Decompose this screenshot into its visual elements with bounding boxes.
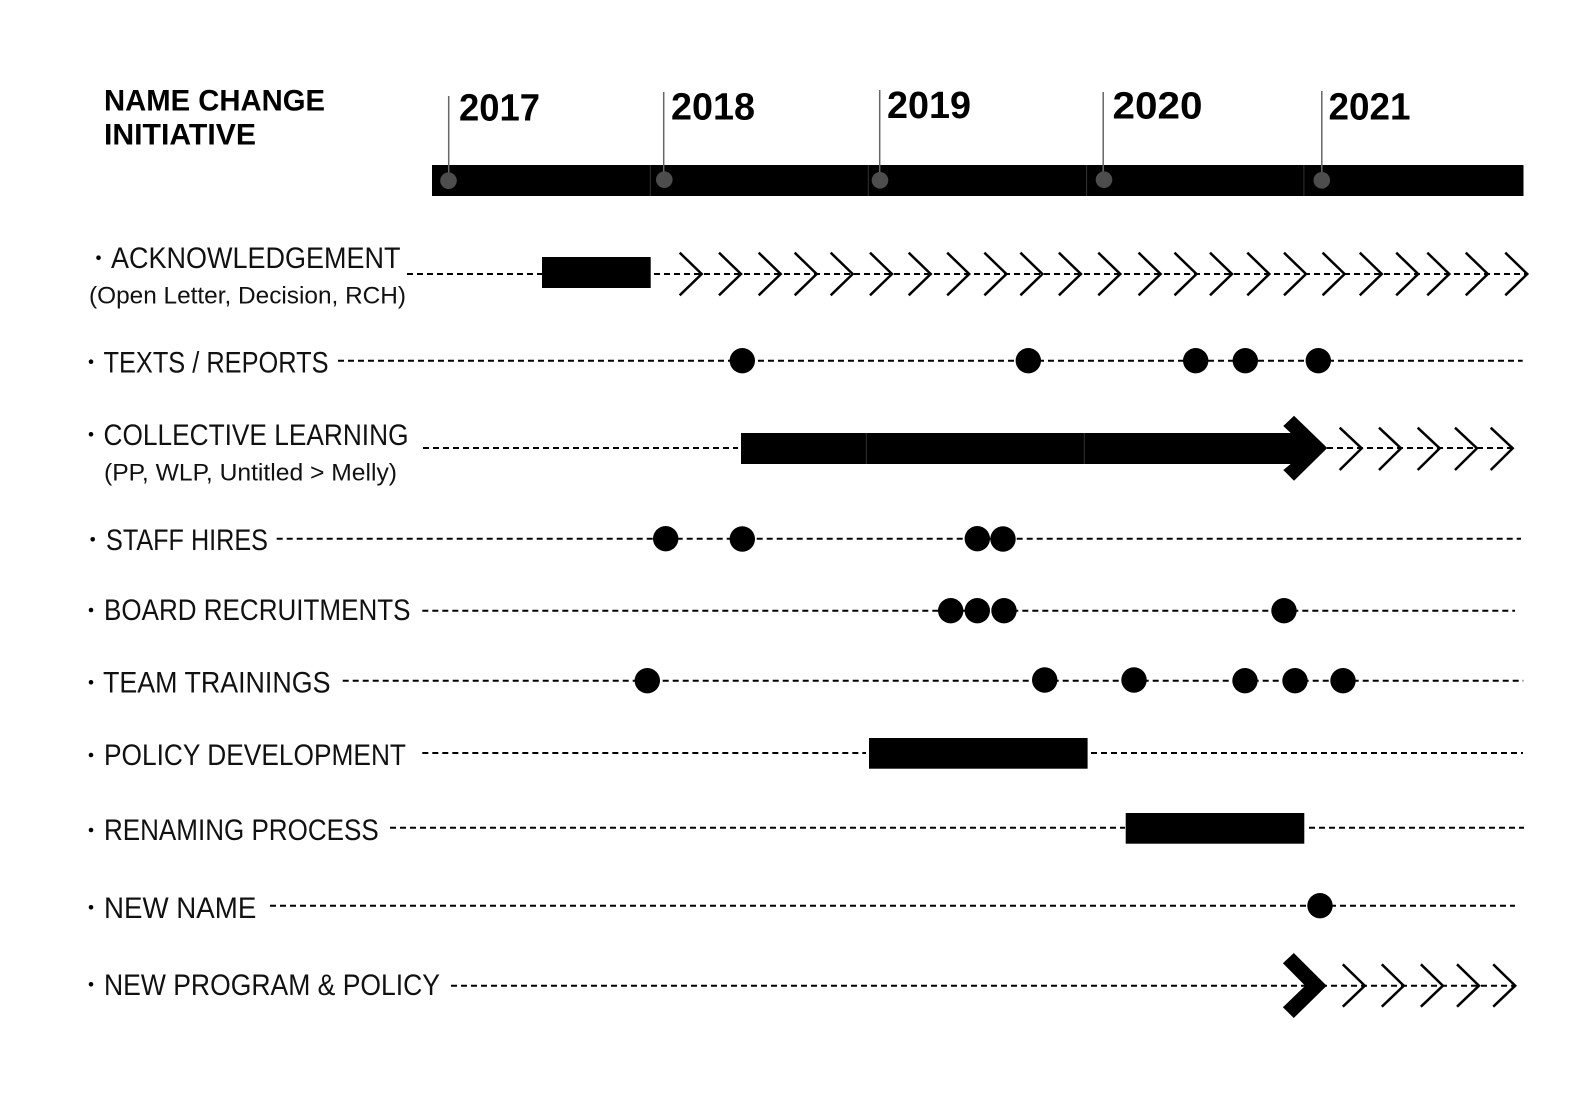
label: new name: NEW NAME bbox=[104, 892, 256, 925]
row: renaming process bbox=[89, 813, 1524, 847]
label: staff hires: STAFF HIRES bbox=[106, 524, 268, 557]
row: team trainings bbox=[89, 667, 1523, 700]
arrow: collective learning bbox=[741, 416, 1327, 481]
milestone dots: board recruitments bbox=[938, 598, 1297, 623]
label: acknowledgement: ACKNOWLEDGEMENT bbox=[111, 242, 400, 275]
heavy chevron: new program start bbox=[1283, 953, 1327, 1018]
row: new name bbox=[89, 892, 1515, 925]
timeline header bbox=[432, 85, 1524, 196]
row: new program & policy bbox=[89, 953, 1515, 1018]
label: board recruitments: BOARD RECRUITMENTS bbox=[104, 594, 410, 627]
label: renaming process: RENAMING PROCESS bbox=[104, 814, 379, 847]
label: collective learning bbox=[89, 419, 408, 487]
label: new program & policy: NEW PROGRAM & POLICY bbox=[104, 969, 440, 1002]
year marker: 2017 bbox=[440, 88, 540, 189]
timeline bar bbox=[432, 165, 1524, 196]
row: staff hires bbox=[90, 524, 1521, 557]
year marker: 2018: 2018 bbox=[671, 87, 755, 129]
row: acknowledgement bbox=[89, 242, 1527, 309]
label: collective learning: COLLECTIVE LEARNING bbox=[104, 419, 408, 452]
row: policy development bbox=[89, 738, 1523, 772]
label: texts / reports: TEXTS / REPORTS bbox=[104, 346, 328, 379]
chevrons: ongoing new program bbox=[1343, 964, 1515, 1007]
title bbox=[104, 85, 325, 152]
year marker: 2021 bbox=[1314, 87, 1410, 189]
milestone dots: team trainings bbox=[635, 667, 1356, 693]
year marker: 2020 bbox=[1096, 86, 1202, 188]
label: collective learning: (PP, WLP, Untitled > Melly) bbox=[104, 460, 397, 487]
row: collective learning bbox=[89, 416, 1513, 487]
year marker: 2019: 2019 bbox=[887, 85, 971, 127]
bar: policy development bbox=[869, 738, 1088, 769]
label: acknowledgement bbox=[89, 242, 406, 309]
title: NAME CHANGE bbox=[104, 85, 325, 118]
year marker: 2020: 2020 bbox=[1112, 86, 1202, 128]
title: INITIATIVE bbox=[104, 119, 256, 152]
label: acknowledgement: (Open Letter, Decision, RCH) bbox=[89, 282, 406, 309]
year marker: 2021: 2021 bbox=[1328, 87, 1410, 129]
chevrons: ongoing collective learning bbox=[1340, 428, 1513, 470]
year marker: 2018 bbox=[656, 87, 755, 188]
chevrons: ongoing acknowledgement bbox=[680, 253, 1527, 295]
row: texts / reports bbox=[89, 346, 1523, 379]
label: team trainings: TEAM TRAININGS bbox=[103, 667, 330, 700]
row: board recruitments bbox=[89, 594, 1515, 627]
year marker: 2019 bbox=[872, 85, 971, 189]
milestone dots: staff hires bbox=[653, 526, 1016, 552]
milestone dot: new name bbox=[1307, 893, 1333, 918]
label: policy development: POLICY DEVELOPMENT bbox=[104, 739, 406, 772]
milestone dots: texts / reports bbox=[730, 348, 1331, 373]
bar: acknowledgement bbox=[542, 257, 651, 288]
bar: renaming process bbox=[1126, 813, 1304, 844]
year marker: 2017: 2017 bbox=[459, 88, 540, 130]
